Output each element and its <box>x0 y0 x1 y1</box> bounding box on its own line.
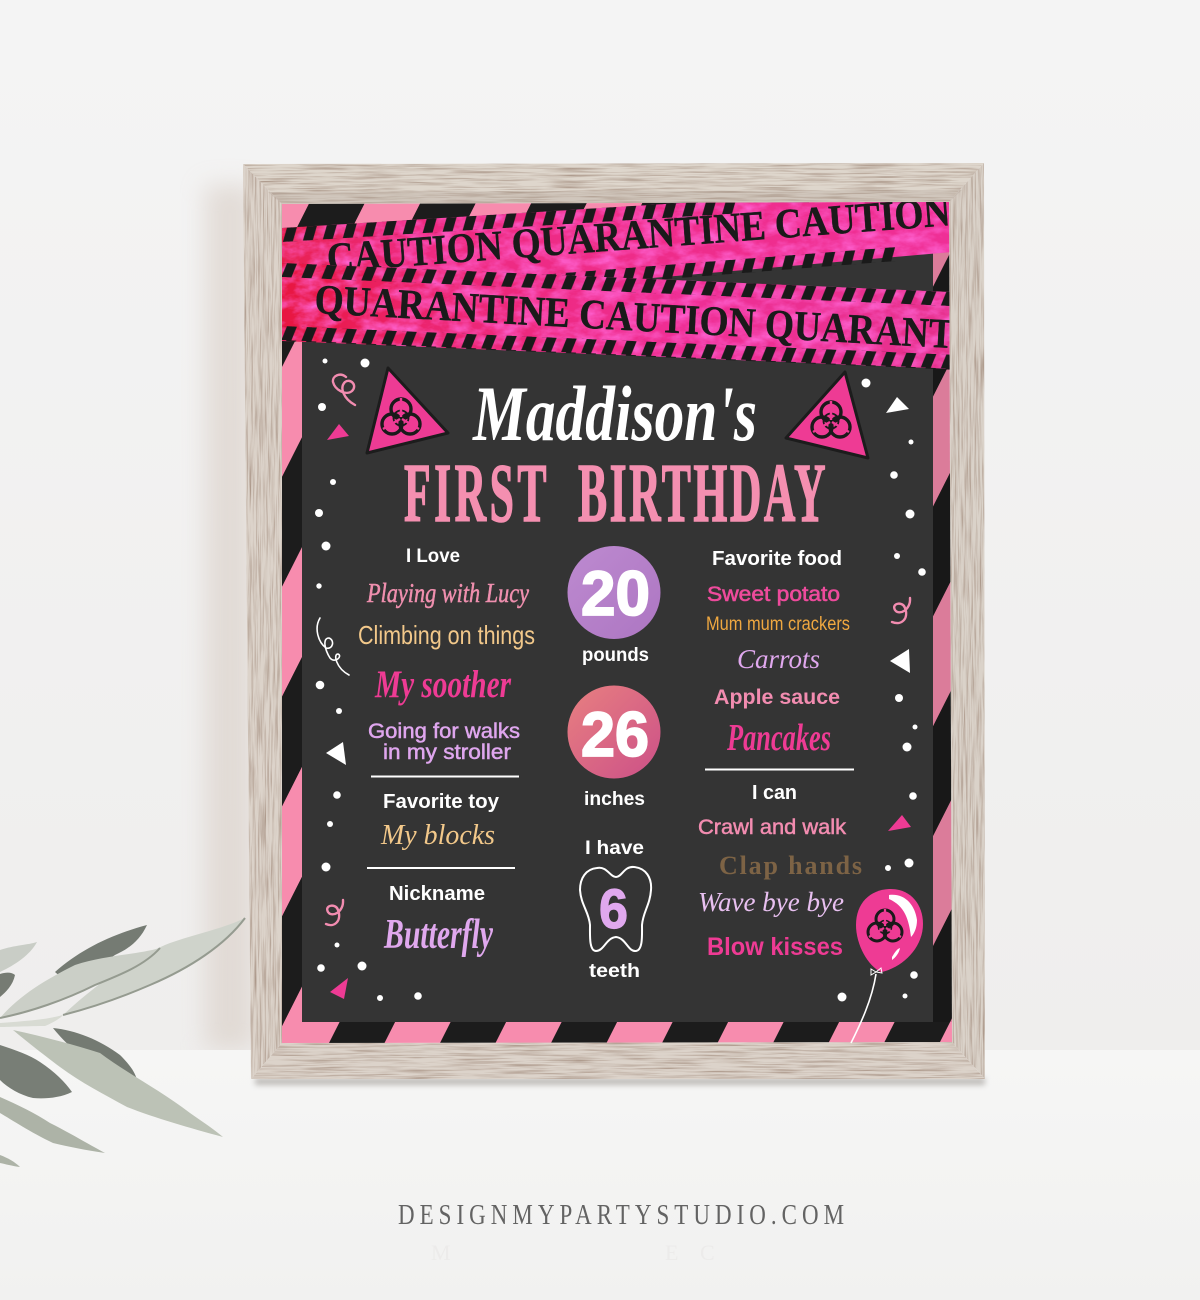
stat: 6 teeth with tooth icon: I have <box>585 838 644 859</box>
icon: biohazard balloon <box>851 889 923 1043</box>
left column: I love list: Playing with Lucy <box>366 578 529 608</box>
right column: favorite food list: Mum mum crackers <box>706 614 850 635</box>
plant: olive branch <box>0 918 245 1167</box>
left column: I love list: in my stroller <box>383 741 511 764</box>
stat: height 26 inches: 26 <box>581 700 649 770</box>
caution tape upper: CAUTION QUARANTINE CAUTION <box>325 189 952 282</box>
divider <box>705 768 854 770</box>
right strip shading <box>933 252 952 1022</box>
stat: 6 teeth with tooth icon: 6 <box>599 877 628 940</box>
right column: favorite food list <box>706 548 850 759</box>
confetti swirls <box>317 375 910 925</box>
right column: I can list: Clap hands <box>719 851 862 880</box>
left column: I love list: My soother <box>374 663 512 706</box>
right column: favorite food list: Pancakes <box>726 717 831 759</box>
stat: height 26 inches: inches <box>584 789 645 810</box>
right column: I can list: Wave bye bye <box>698 887 844 917</box>
left column: I love list: I Love <box>406 546 460 567</box>
right column: I can list <box>698 782 862 961</box>
title: first birthday: BIRTHDAY <box>578 447 826 540</box>
icon: right biohazard warning triangle <box>786 372 868 458</box>
footer: faint ghost letters: E <box>665 1240 678 1265</box>
footer: faint ghost letters <box>431 1240 715 1265</box>
stat: weight 20 pounds: 20 <box>581 559 650 629</box>
title: first birthday <box>404 447 826 540</box>
footer: faint ghost letters: C <box>700 1240 715 1265</box>
right column: favorite food list: Apple sauce <box>714 686 840 709</box>
caution tape lower <box>281 263 955 370</box>
picture frame: wooden moulding <box>243 163 985 1079</box>
left column: favorite toy: My blocks <box>380 819 495 851</box>
confetti triangles <box>326 397 911 999</box>
diagonal pink and black striped background <box>282 200 954 1045</box>
right column: favorite food list: Favorite food <box>712 548 842 570</box>
divider <box>367 867 515 869</box>
stat: height 26 inches <box>568 686 660 810</box>
left column: favorite toy: Favorite toy <box>383 791 500 813</box>
right column: I can list: Crawl and walk <box>698 816 847 839</box>
left column: favorite toy <box>380 791 500 851</box>
stat: 6 teeth with tooth icon <box>580 838 651 982</box>
footer: faint ghost letters: M <box>431 1240 451 1265</box>
left column: I love list <box>358 546 535 764</box>
divider <box>371 776 519 778</box>
stat: 6 teeth with tooth icon: teeth <box>589 961 640 982</box>
title: first birthday: FIRST <box>404 447 546 540</box>
caution tape upper <box>282 202 950 280</box>
right column: I can list: I can <box>752 782 797 804</box>
confetti dots <box>315 358 926 1002</box>
title: name: Maddison's <box>471 370 757 457</box>
stat: weight 20 pounds: pounds <box>582 645 649 666</box>
right column: favorite food list: Carrots <box>737 644 820 674</box>
icon: left biohazard warning triangle <box>367 368 448 453</box>
dark chalkboard panel <box>302 250 933 1022</box>
stat: weight 20 pounds <box>568 546 660 666</box>
right column: favorite food list: Sweet potato <box>707 583 840 606</box>
poster board <box>281 186 955 1045</box>
caution tape lower: QUARANTINE CAUTION QUARANT <box>313 277 955 358</box>
left column: nickname <box>383 883 493 958</box>
left column: nickname: Nickname <box>389 883 485 905</box>
left column: I love list: Going for walks <box>368 720 520 743</box>
footer: studio url: DESIGNMYPARTYSTUDIO.COM <box>398 1199 844 1231</box>
left column: nickname: Butterfly <box>383 912 493 958</box>
right column: I can list: Blow kisses <box>707 933 843 961</box>
left column: I love list: Climbing on things <box>358 620 535 650</box>
